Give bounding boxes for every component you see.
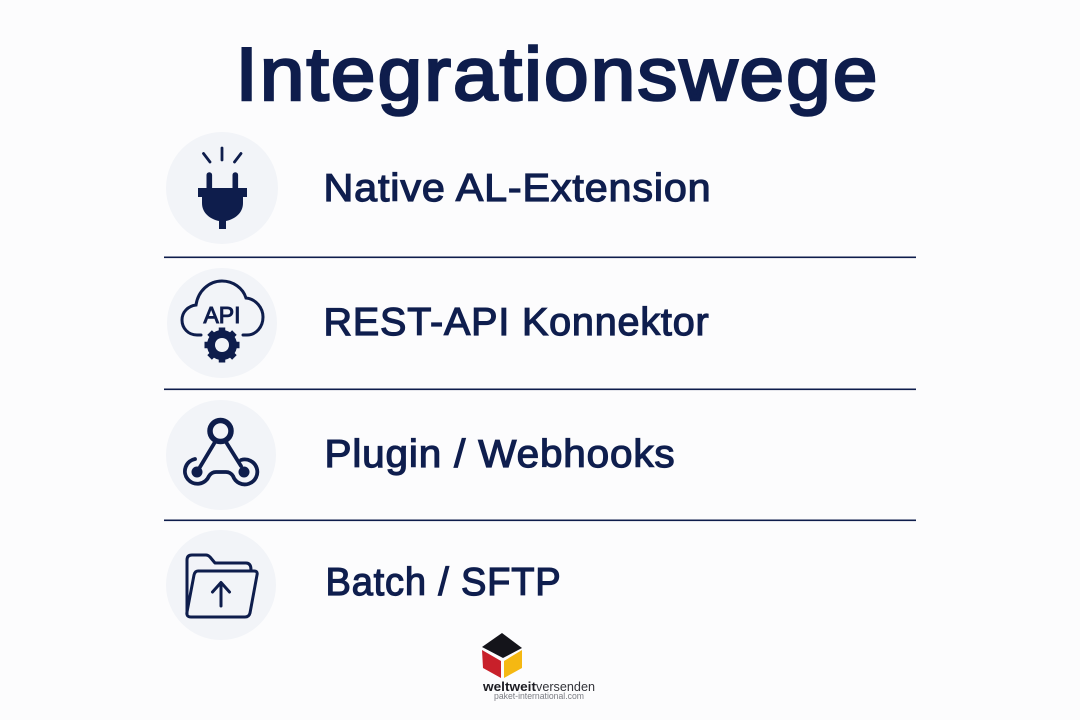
icon: API cloud with gear: API	[203, 302, 241, 328]
logo wordmark	[482, 679, 595, 694]
row: Native AL-Extension	[166, 132, 712, 244]
row: Batch / SFTP	[166, 530, 562, 640]
logo url: paket-international.com	[494, 691, 584, 702]
row: REST-API Konnektor	[167, 268, 710, 378]
icon: folder upload	[166, 530, 276, 640]
icon: plug	[166, 132, 278, 244]
label: Batch / SFTP	[326, 561, 562, 604]
divider	[164, 256, 916, 258]
logo wordmark: versenden	[536, 679, 595, 694]
icon: API cloud with gear	[167, 268, 277, 378]
title: Integrationswege	[236, 32, 880, 116]
logo wordmark: weltweit	[482, 679, 537, 694]
logo: weltweitversenden	[482, 633, 595, 702]
logo cube	[482, 633, 522, 678]
row: Plugin / Webhooks	[166, 400, 676, 510]
label: Plugin / Webhooks	[324, 433, 676, 476]
label: Native AL-Extension	[324, 167, 712, 210]
divider	[164, 520, 916, 521]
label: REST-API Konnektor	[324, 301, 710, 344]
divider	[164, 388, 916, 390]
icon: webhook nodes	[166, 400, 276, 510]
